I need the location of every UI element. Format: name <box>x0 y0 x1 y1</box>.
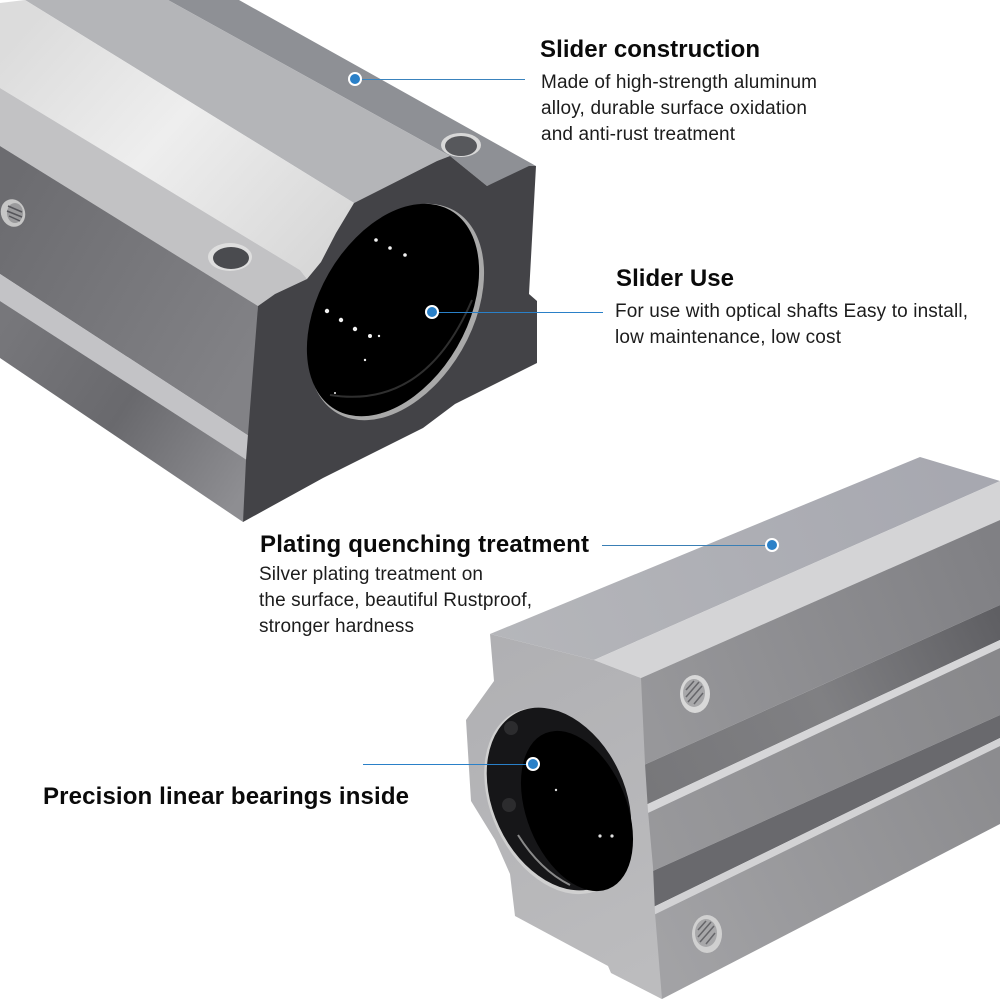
callout: slider use leader <box>426 306 603 318</box>
callout: plating leader <box>602 539 778 551</box>
middle panel <box>635 648 1000 879</box>
side mounting hole <box>208 243 252 271</box>
text block: plating quenching treatment <box>259 531 589 637</box>
top main face <box>25 0 450 203</box>
text block: slider use <box>615 265 968 348</box>
text block: plating quenching treatment: the surface, beautiful Rustproof, <box>259 590 532 611</box>
lower panel <box>635 746 1000 999</box>
lower threaded hole <box>692 915 722 953</box>
lower chamfer <box>0 88 307 306</box>
lower side face <box>0 301 250 522</box>
bearing bore <box>456 684 659 918</box>
upper side panel <box>635 520 1000 769</box>
dark end face <box>243 156 537 522</box>
bearing bore <box>271 173 520 451</box>
text block: slider use: low maintenance, low cost <box>615 327 842 348</box>
text block: slider construction: alloy, durable surface oxidation <box>541 98 807 119</box>
text block: plating quenching treatment: Silver plating treatment on <box>259 564 483 585</box>
callout: bearings leader <box>363 758 539 770</box>
text block: plating quenching treatment: Plating quenching treatment <box>260 531 589 558</box>
front end face <box>466 634 662 999</box>
light side stripe <box>0 274 255 462</box>
product photo: upper slider block <box>0 0 537 522</box>
bright chamfer <box>594 481 1000 678</box>
top face <box>490 457 1000 660</box>
text block: slider construction: and anti-rust treatment <box>541 124 736 145</box>
text block: plating quenching treatment: stronger hardness <box>259 616 414 637</box>
product photo: lower slider block <box>456 457 1000 999</box>
side face <box>0 146 258 440</box>
lower light stripe <box>635 738 1000 924</box>
text block: slider use: Slider Use <box>616 265 734 292</box>
upper groove <box>635 605 1000 810</box>
upper light stripe <box>635 640 1000 819</box>
text block: slider construction <box>540 36 817 145</box>
threaded hole <box>0 196 29 230</box>
top flange strip <box>168 0 536 186</box>
lower groove <box>635 715 1000 916</box>
text block: slider construction: Made of high-strength aluminum <box>541 72 817 93</box>
bright chamfer <box>0 0 354 279</box>
text block: slider construction: Slider construction <box>540 36 760 63</box>
callout: slider construction leader <box>349 73 525 85</box>
heading: precision linear bearings: Precision linear bearings inside <box>43 783 409 810</box>
upper threaded hole <box>680 675 710 713</box>
top mounting hole <box>441 133 481 157</box>
text block: slider use: For use with optical shafts Easy to install, <box>615 301 968 322</box>
